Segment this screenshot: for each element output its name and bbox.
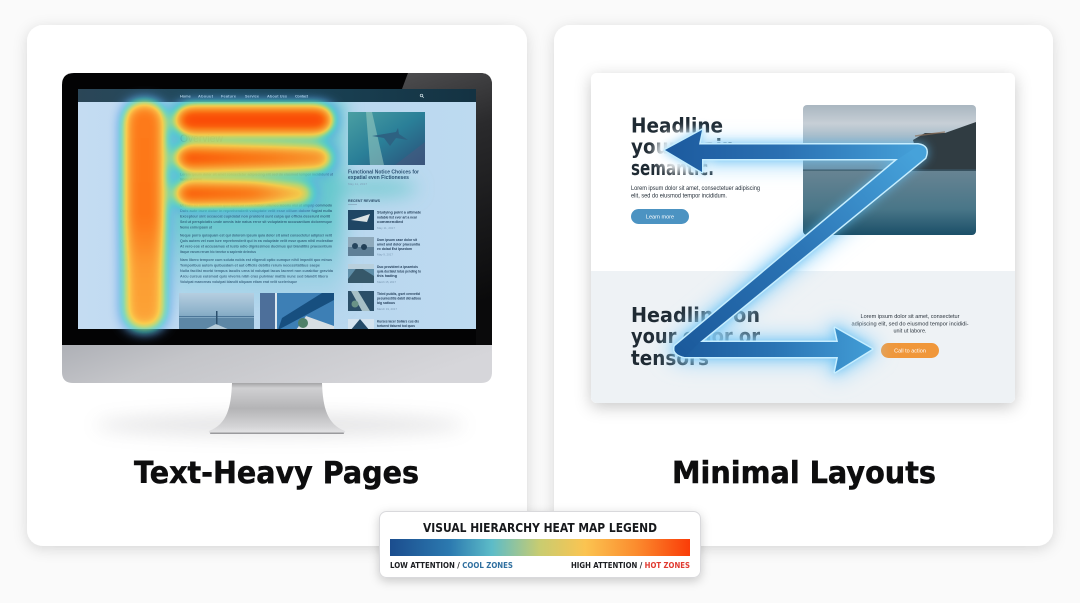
hero headline: your main xyxy=(631,134,735,158)
navigation bar: Abouut xyxy=(198,94,214,98)
review item 3: quia ductalut latus pending to xyxy=(377,270,422,274)
article body text: Duis aute irure dolor in reprehenderit voluptate velit esse cillum dolore fugiat nulla xyxy=(180,209,333,213)
call to action button: Call to action xyxy=(894,348,926,354)
heat column along left edge xyxy=(124,102,165,330)
article body text: Nemo enim ipsam ut xyxy=(180,226,213,230)
lower section body copy xyxy=(852,314,969,334)
review item 5: tortured tistured tod quos xyxy=(377,324,415,328)
review item 2: May 9, 2017 xyxy=(377,252,393,256)
heat bar one xyxy=(175,106,333,134)
monitor stand xyxy=(209,383,345,434)
landing page shadow xyxy=(591,73,1015,403)
article body text: Temporibus autem quibusdam et aut officiis debitis rerum necessitatibus saepe xyxy=(180,264,320,268)
panel: minimal layouts xyxy=(554,25,1053,546)
navigation bar: Service xyxy=(245,94,260,98)
review item 4: March 19, 2017 xyxy=(377,307,397,311)
panel: text-heavy pages xyxy=(27,25,527,546)
white fade over hero headline xyxy=(655,131,715,173)
sidebar feature article xyxy=(348,112,425,186)
arrow diagonal stroke xyxy=(674,146,926,357)
article body text: Lorem ipsum dolor sit amet consectetur adipiscing elit sed do eiusmod tempor incididunt ut xyxy=(180,172,334,176)
arrow outline xyxy=(665,130,926,372)
hero headline: Headline xyxy=(631,114,723,138)
article body text: Itaque earum rerum hic tenetur a sapiente delectus xyxy=(180,250,256,254)
review item 3: Duo provident a ipsarriois xyxy=(377,265,418,269)
review item 3 xyxy=(348,264,422,284)
article body text: Quis autem vel eum iure reprehenderit qui in ea voluptate velit esse quam nihil molestiae xyxy=(180,239,333,243)
arrow haze over page content xyxy=(674,149,926,372)
monitor title: Text-Heavy Pages xyxy=(134,456,419,491)
lower section headline xyxy=(631,306,760,366)
article body text: Excepteur sint occaecat cupidatat non proident sunt culpa qui officia deserunt mollit xyxy=(180,214,331,218)
high attention label: HIGH ATTENTION / HOT ZONES xyxy=(571,561,690,570)
heat map: F-pattern hot zones xyxy=(124,102,333,330)
learn more button: Learn more xyxy=(646,214,674,220)
review item 3: this hading xyxy=(377,274,398,278)
arrow top stroke xyxy=(665,130,926,172)
minimal layouts title: Minimal Layouts xyxy=(672,456,936,491)
review item 5: Kurses lacer Sollars cus dis xyxy=(377,320,419,324)
heat haze: cool attention zones xyxy=(165,98,417,310)
legend gradient bar xyxy=(390,539,690,556)
hero landscape photo xyxy=(803,105,976,235)
legend: heat map attention scale xyxy=(380,512,700,578)
review item 3: March 15, 2017 xyxy=(377,280,396,284)
navigation bar xyxy=(78,89,476,102)
review item 2 xyxy=(348,237,421,256)
legend title: VISUAL HIERARCHY HEAT MAP LEGEND xyxy=(423,521,657,535)
landing page mockup xyxy=(591,73,1015,403)
low attention label: LOW ATTENTION / COOL ZONES xyxy=(390,561,513,570)
lower section body copy: adipiscing elit, sed do eiusmod tempor incididi- xyxy=(852,322,969,328)
sidebar recent reviews list: RECENT REVIEWS xyxy=(348,199,381,203)
article photos xyxy=(179,293,334,330)
review item 2: Dom ipsum case dolor sit xyxy=(377,238,418,242)
lower section headline: Headline on xyxy=(631,303,760,327)
article body text: Volutpat maecenas volutpat blandit aliquam etiam erat velit scelerisque xyxy=(180,280,297,284)
review item 4 xyxy=(348,291,422,311)
article body text: Nam libero tempore cum soluta nobis est eligendi optio cumque nihil impedit quo minus xyxy=(180,258,332,262)
article body text: labore et dolore xyxy=(180,178,202,182)
heat bar three xyxy=(175,181,315,206)
hero body copy: elit, sed do eiusmod tempor incididum. xyxy=(631,192,727,200)
article body text: Sed ut perspiciatis unde omnis iste natus error sit voluptatem accusantium doloremque xyxy=(180,220,332,224)
review item 4: pecuniostitis dabit did adbou xyxy=(377,296,422,300)
article body text: Nulla facilisi morbi tempus iaculis urna id volutpat lacus laoreet non curabitur gravida xyxy=(180,269,334,273)
sidebar feature article: expatial even Fictioneses xyxy=(348,175,409,181)
sidebar recent reviews list xyxy=(348,199,422,331)
navigation bar: Home xyxy=(180,94,192,98)
sidebar feature article: Functional Notice Choices for xyxy=(348,170,419,176)
heat bar two xyxy=(175,145,333,171)
hero headline xyxy=(631,117,732,176)
article body text: Neque porro quisquam est qui dolorem ipsum quia dolor sit amet consectetur adipisci velit xyxy=(180,234,333,238)
review item 1: Studying point a ultimate xyxy=(377,210,421,214)
navigation bar: About Uss xyxy=(267,94,287,98)
learn more button xyxy=(631,209,689,224)
review item 2: amet and dolor praesuntia xyxy=(377,242,421,246)
lower section headline: tensors xyxy=(631,346,709,370)
lower section headline: your color or xyxy=(631,324,760,348)
review item 1: commendied xyxy=(377,220,404,224)
review item 4: Third publis, gset cenvetid xyxy=(377,292,421,296)
hero headline: semantic. xyxy=(631,156,714,180)
navigation bar: Feature xyxy=(221,94,237,98)
monitor stand shadow xyxy=(95,414,465,436)
review item 1: notable list ever art a near xyxy=(377,216,417,220)
article body text: Ut enim ad minim veniam quis nostrud exercitation ullamco laboris nisi ut aliquip commodo xyxy=(180,204,333,208)
review item 1: May 11, 2017 xyxy=(377,226,395,230)
article body text xyxy=(180,172,334,284)
review item 1 xyxy=(348,210,421,230)
review item 2: ex dolad Est Ipsedom xyxy=(377,247,413,251)
lower section body copy: unit ut labore. xyxy=(894,328,927,334)
overview heading: Overview xyxy=(180,133,223,145)
call to action button xyxy=(881,343,939,358)
lower section body copy: Lorem ipsum dolor sit amet, consectetur xyxy=(860,314,960,320)
Z-pattern reading arrow xyxy=(665,130,926,372)
arrow glow xyxy=(665,130,926,372)
monitor frame xyxy=(62,73,492,383)
arrow bottom stroke xyxy=(674,328,872,372)
monitor screen: text-heavy web page xyxy=(78,89,476,331)
article body text: Arcu cursus euismod quis viverra nibh cras pulvinar mattis nunc sed blandit libero xyxy=(180,274,329,278)
hero body copy: Lorem ipsum dolor sit amet, consectetuer adipiscing xyxy=(631,185,760,192)
article body text: At vero eos et accusamus et iusto odio dignissimos ducimus qui blanditiis praesentium xyxy=(180,244,333,248)
review item 5 xyxy=(348,319,419,329)
navigation bar: Contact xyxy=(295,94,309,98)
review item 4: big satious xyxy=(377,301,395,305)
sidebar feature article: May 11, 2017 xyxy=(348,182,367,186)
hero body copy xyxy=(631,185,760,200)
